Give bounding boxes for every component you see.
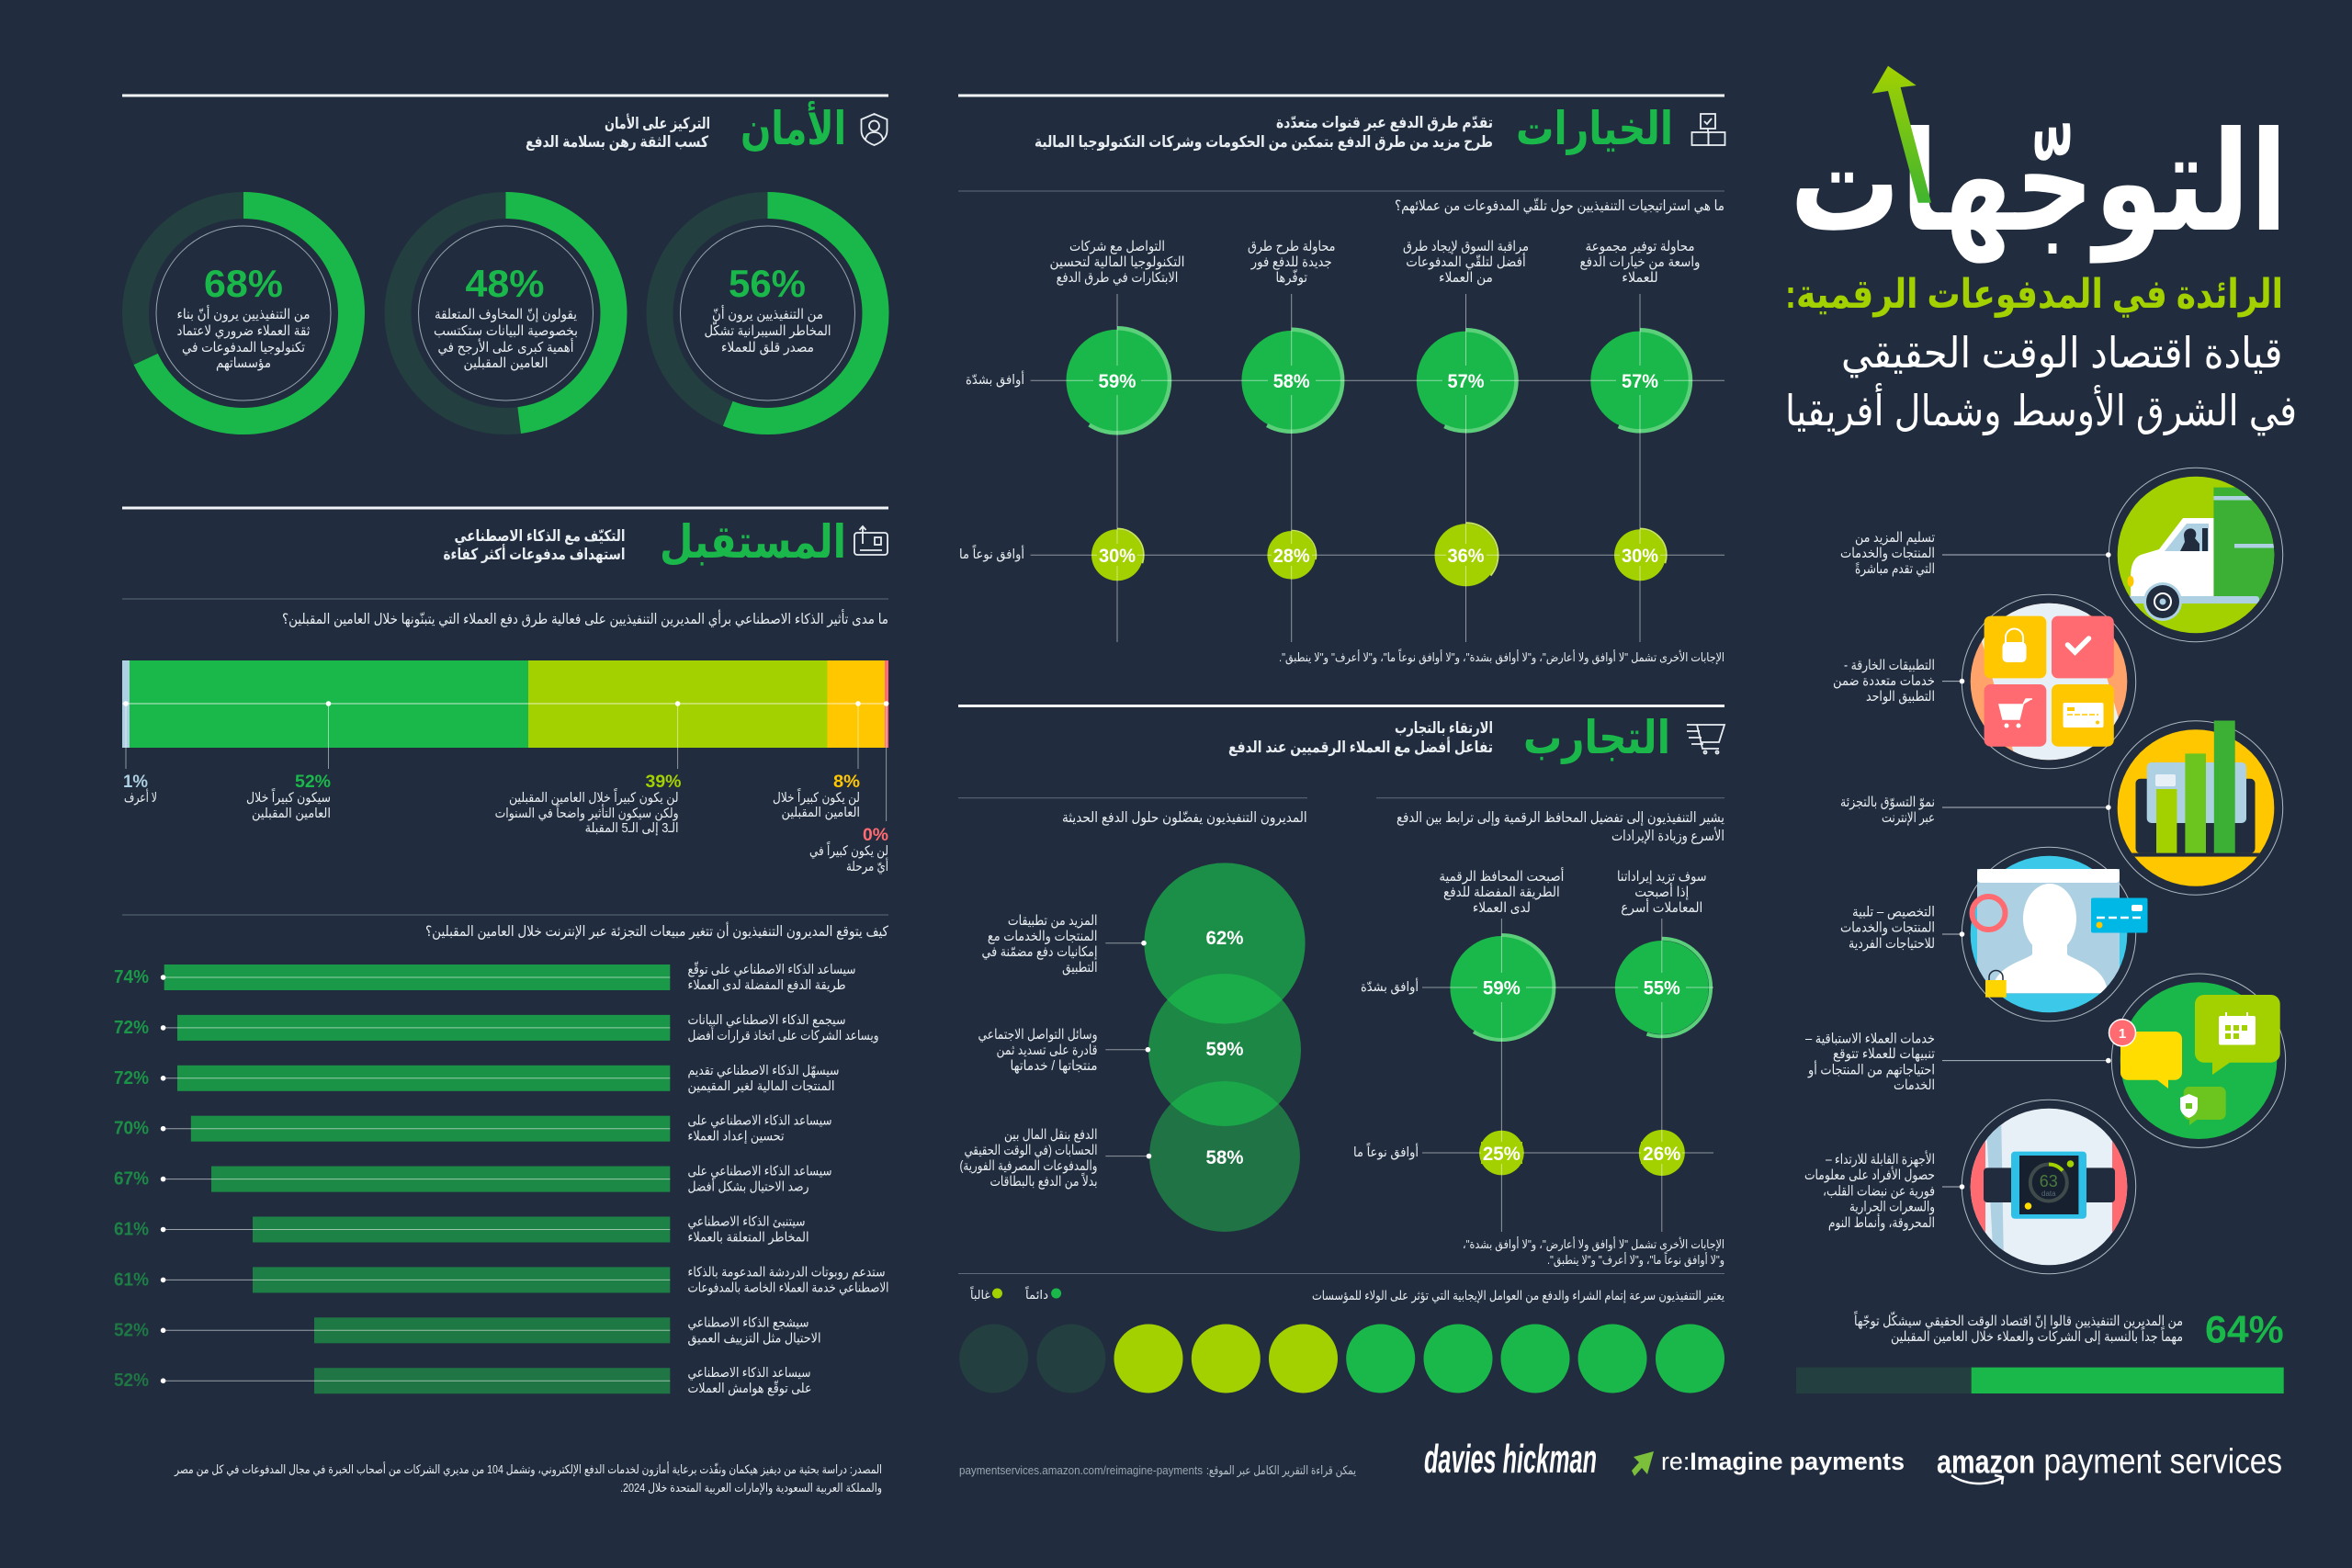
subtitle: white [1785,329,2297,436]
label: 39%: لن يكون كبيراً خلال العامين المقبلين [509,788,679,806]
bar row 52%: 52% [114,1371,149,1391]
bar row 70%: تحسين إعداد العملاء [687,1130,785,1145]
title block [1785,66,2297,436]
source note [174,1461,882,1495]
donut: 48%: أهمية كبرى على الأرجح في [437,338,573,356]
logo: amazon payment services [1937,1442,2282,1484]
donut: 56%: من التنفيذيين يرون أنّ [712,305,823,322]
bar row 52%: 52% [114,1320,149,1340]
trend: proactive service: 1 [2119,1026,2126,1042]
venn labels: الحسابات (في الوقت الحقيقي [965,1143,1097,1159]
bar row 70%: 70% [114,1119,149,1139]
footnote [1463,1236,1724,1268]
bar row 74%: 74% [114,967,149,987]
bubble matrix chart: أوافق نوعاً ما [959,545,1024,562]
heading: future: استهداف مدفوعات أكثر كفاءة [443,544,625,564]
bubble matrix chart: 57% [1622,371,1658,392]
venn labels: المزيد من تطبيقات [1008,913,1097,929]
report link: paymentservices.amazon.com/reimagine-payments [959,1464,1203,1477]
bar row 61%: 61% [114,1220,149,1240]
venn chart: 59% [1205,1039,1244,1060]
bar row 70% [114,1114,832,1145]
venn labels: الدفع بنقل المال بين [1004,1127,1097,1143]
panel: choices [958,94,1725,665]
bar row 61%: ستدعم روبوتات الدردشة المدعومة بالذكاء [687,1265,886,1280]
bar row 52%: سيساعد الذكاء الاصطناعي [687,1366,810,1381]
bar row 72%: 72% [114,1018,149,1038]
trend: proactive service label: احتياجاتهم من المنتجات أو [1807,1060,1935,1077]
trend: personalisation label: المنتجات والخدمات [1840,920,1935,936]
trend: super apps label: خدمات متعددة ضمن [1833,673,1935,689]
donut: 68% [136,206,351,421]
label: 8%: 8% [833,773,860,792]
trend: online retail [2106,720,2283,895]
bar row 72%: 72% [114,1068,149,1089]
donut: 48%: يقولون إنّ المخاوف المتعلقة [435,307,577,322]
wallet column labels: إذا أصبحت [1634,883,1689,900]
column labels [1049,239,1700,287]
heading: experiences [1228,712,1670,764]
label: don't know 1% [123,773,157,806]
heading: future: التكيّف مع الذكاء الاصطناعي [454,527,625,546]
icon: shield [862,114,888,145]
bar row 67%: سيساعد الذكاء الاصطناعي على [687,1165,832,1179]
logo: amazon payment services: payment services [2043,1442,2282,1481]
bar row 70%: سيساعد الذكاء الاصطناعي على [687,1114,832,1129]
bubble matrix chart: 58% [1273,371,1310,392]
connector lines [1942,555,2109,1187]
wallet bubble chart: 26% [1643,1144,1681,1165]
bubble matrix chart: 59% [1099,371,1136,392]
trend: proactive service label: خدمات العملاء الاستباقية – [1805,1031,1935,1046]
legend [970,1286,1061,1302]
sub-heading: modern solutions: المديرون التنفيذيون يفضّلون حلول الدفع الحديثة [1062,810,1307,827]
label: 52%: العامين المقبلين [252,807,331,821]
sub-heading: wallets [1396,810,1724,845]
wallet bubble chart: 55% [1644,977,1680,999]
heading: security: الأمان [741,100,846,154]
trend: delivery label: التي تقدم مباشرةً [1855,561,1935,578]
footnote: الإجابات الأخرى تشمل "لا أوافق ولا أعارض"، و"لا أوافق بشدة"، و"لا أوافق نوعاً ما"، و"لا أعرف" و"لا ينطبق". [1279,649,1724,665]
bar row 72%: سيجمع الذكاء الاصطناعي البيانات [687,1013,845,1028]
trend: personalisation label [1840,904,1935,952]
wallet column labels [1439,867,1707,916]
bar row 67% [114,1165,832,1195]
report link: يمكن قراءة التقرير الكامل عبر الموقع: [1206,1463,1356,1478]
donut: 68%: من التنفيذيين يرون أنّ بناء [176,305,311,322]
wallet column labels: أصبحت المحافظ الرقمية [1439,867,1564,885]
trend: wearables label: الأجهزة القابلة للارتداء – [1826,1150,1935,1168]
trend: delivery label [1840,530,1935,578]
label: 8% [773,773,860,820]
trend: delivery label: تسليم المزيد من [1855,530,1935,546]
icon: card with arrow [854,526,888,555]
trend: proactive service label [1805,1031,1935,1093]
callout: 64% real-time economy [1796,1308,2284,1393]
heading: choices: طرح مزيد من طرق الدفع بتمكين من الحكومات وشركات التكنولوجيا المالية [1035,133,1493,152]
loyalty statement: يعتبر التنفيذيون سرعة إتمام الشراء والدفع من العوامل الإيجابية التي تؤثر على الولاء للمؤسسات [1312,1288,1724,1303]
column labels: واسعة من خيارات الدفع [1580,254,1700,270]
footnote: و"لا أوافق نوعاً ما"، و"لا أعرف" و"لا ينطبق". [1547,1251,1724,1268]
wallet bubble chart: أوافق نوعاً ما [1353,1143,1419,1160]
stacked bar chart [122,660,888,821]
bar row 61% [114,1214,808,1246]
column labels: للعملاء [1622,270,1658,286]
trend: super apps label: التطبيقات الخارقة - [1844,658,1935,673]
trend: proactive service label: الخدمات [1894,1077,1935,1093]
trend: online retail label: عبر الإنترنت [1882,810,1935,826]
callout: 64% real-time economy: 64% [2205,1308,2284,1350]
row: strongly agree bubbles [1065,328,1690,433]
donut: 68%: تكنولوجيا المدفوعات في [182,340,305,356]
trend: wearables: data [2041,1190,2056,1198]
venn labels: والمدفوعات المصرفية الفورية) [959,1158,1097,1174]
bar row 52%: سيشجع الذكاء الاصطناعي [687,1315,808,1330]
donut: 56%: المخاطر السيبرانية تشكّل [704,321,831,339]
column labels: أفضل لتلقّي المدفوعات [1406,253,1526,271]
donut: 56% [660,206,876,421]
panel: security [122,94,888,421]
bar row 72% [114,1013,878,1043]
venn labels [959,913,1097,1190]
bar row 72%: سيسهّل الذكاء الاصطناعي تقديم [687,1064,840,1078]
donut: 56%: مصدر قلق للعملاء [721,340,814,355]
bar row 74%: طريقة الدفع المفضلة لدى العملاء [687,978,845,993]
label: 0%: أيّ مرحلة [846,857,888,874]
trend: wearables label: والسعرات الحرارية [1849,1200,1935,1215]
question: كيف يتوقع المديرون التنفيذيون أن تتغير مبيعات التجزئة عبر الإنترنت خلال العامين المقبلين؟ [425,921,889,941]
trend: super apps [1959,593,2137,770]
bar row 52% [114,1366,812,1396]
label: don't know 1%: لا أعرف [124,788,157,806]
panel: future [114,507,889,1495]
label: 52%: 52% [295,773,331,792]
trend: wearables label: حصول الأفراد على معلومات [1804,1166,1935,1183]
source note: المصدر: دراسة بحثية من ديفيز هيكمان ونفّذت برعاية أمازون لخدمات الدفع الإلكتروني، وتشمل 104 من مديري الشركات من أصحاب الخبرة في مجال المدفوعات في كل من مصر [174,1461,882,1477]
wallet bubble chart [1353,919,1713,1232]
wallet column labels: لدى العملاء [1473,900,1531,916]
heading: security [526,100,846,154]
label: 52%: سيكون كبيراً خلال [246,788,331,806]
bar row 67%: رصد الاحتيال بشكل أفضل [687,1178,808,1195]
horizontal bar chart [114,961,889,1396]
bar row 61%: سيتنبئ الذكاء الاصطناعي [687,1214,805,1229]
trend: wearables label [1804,1150,1935,1231]
report link [959,1463,1356,1478]
donut: 48% [398,206,614,421]
donut: 68%: ثقة العملاء ضروري لاعتماد [176,323,311,340]
row: somewhat agree bubbles [1091,523,1667,587]
donut: 68%: 68% [204,262,283,305]
trend: proactive service label: تنبيهات للعملاء تتوقع [1833,1046,1935,1062]
donut: 48%: بخصوصية البيانات ستكتسب [434,323,578,339]
bubble matrix chart: 57% [1448,371,1485,392]
venn labels: منتجاتها / خدماتها [1011,1058,1097,1074]
trend: super apps label [1833,658,1935,705]
callout: 64% real-time economy: مهماً جداً بالنسبة إلى الشركات والعملاء خلال العامين المقبلين [1891,1326,2183,1345]
trend: wearables [1960,1100,2136,1274]
panel: experiences [958,705,1724,1393]
donut: 48%: 48% [465,262,544,305]
bar row 67%: 67% [114,1169,149,1190]
wallet bubble chart: أوافق بشدّة [1361,977,1419,995]
logo: davies hickman: davies hickman [1424,1437,1597,1482]
label: 39%: الـ3 إلى الـ5 المقبلة [585,821,679,836]
trend: wearables label: فورية عن نبضات القلب، [1823,1183,1935,1200]
bar row 52%: الاحتيال مثل التزييف العميق [687,1331,821,1346]
bubble matrix chart: 30% [1099,546,1136,567]
column labels: مراقبة السوق لإيجاد طرق [1403,239,1529,254]
wallet bubble chart: 25% [1483,1144,1521,1165]
venn labels: المنتجات والخدمات مع [988,929,1097,944]
logo: reimagine payments: re:Imagine payments [1661,1448,1905,1475]
bubble matrix chart: 30% [1622,546,1658,567]
trend: proactive service [2106,974,2286,1147]
bar row 61%: 61% [114,1269,149,1290]
trend: super apps label: التطبيق الواحد [1866,689,1935,705]
bar row 74% [114,961,856,993]
bar row 72%: المنتجات المالية لغير المقيمين [687,1079,834,1094]
donut: 68%: مؤسساتهم [216,355,271,371]
source note: والمملكة العربية السعودية والإمارات العربية المتحدة خلال 2024. [620,1481,882,1495]
arrow [1872,66,1931,203]
label: 39% [495,773,682,836]
pictogram: ten circles [959,1325,1724,1393]
label: 0% [809,826,888,874]
question: ما هي استراتيجيات التنفيذيين حول تلقّي المدفوعات من عملائهم؟ [1395,198,1724,215]
label: don't know 1%: 1% [123,773,148,792]
heading: experiences: تفاعل أفضل مع العملاء الرقميين عند الدفع [1228,737,1493,757]
column labels: من العملاء [1439,270,1493,286]
heading: experiences: التجارب [1523,712,1670,764]
donut: 48%: العامين المقبلين [463,355,548,371]
column labels: التواصل مع شركات [1069,239,1165,254]
sub-heading: wallets: يشير التنفيذيون إلى تفضيل المحافظ الرقمية وإلى ترابط بين الدفع [1396,810,1724,827]
subtitle: white: قيادة اقتصاد الوقت الحقيقي [1841,329,2282,378]
label: 52% [246,773,331,821]
heading: choices: تقدّم طرق الدفع عبر قنوات متعدّدة [1276,114,1493,132]
column labels: جديدة للدفع فور [1250,254,1332,270]
column labels: الابتكارات في طرق الدفع [1057,270,1178,287]
venn labels: بدلاً من الدفع بالبطاقات [990,1172,1097,1190]
question: ما مدى تأثير الذكاء الاصطناعي برأي المديرين التنفيذيين على فعالية طرق دفع العملاء التي يتبنّونها خلال العامين المقبلين؟ [282,609,888,628]
label: 0%: 0% [863,826,888,845]
bubble matrix chart [959,294,1724,642]
heading: future: المستقبل [660,516,846,568]
heading: experiences: الارتقاء بالتجارب [1395,719,1493,737]
label: 8%: لن يكون كبيراً خلال [773,788,860,806]
venn labels: قادرة على تسديد ثمن [996,1043,1097,1058]
wallet column labels: المعاملات أسرع [1621,898,1702,916]
legend: دائماً [1025,1286,1048,1302]
trend: personalisation [1960,847,2148,1021]
venn chart [1105,863,1306,1232]
heading: security: كسب الثقة رهن بسلامة الدفع [526,133,708,152]
icon: cart [1687,725,1724,753]
trend: wearables: 63 [2040,1172,2058,1190]
logo: amazon payment services: amazon [1937,1442,2035,1481]
bubble matrix chart: 28% [1273,546,1310,567]
heading: future [443,516,846,568]
sub-heading: wallets: الأسرع وزيادة الإيرادات [1611,827,1724,845]
trend: personalisation label: للاحتياجات الفردية [1849,936,1935,952]
heading: choices [1035,103,1673,155]
callout: 64% real-time economy: من المديرين التنفيذيين قالوا إنّ اقتصاد الوقت الحقيقي سيشكّل توجّهاً [1853,1311,2183,1330]
column labels: محاولة طرح طرق [1248,239,1335,254]
trend: personalisation label: التخصيص – تلبية [1852,904,1935,920]
wallet column labels: سوف تزيد إيراداتنا [1617,869,1707,885]
wallet column labels: الطريقة المفضلة للدفع [1443,885,1560,900]
label: 0%: لن يكون كبيراً في [809,841,888,859]
column labels: توفّرها [1275,269,1307,286]
column labels: محاولة توفير مجموعة [1586,239,1694,254]
venn labels: إمكانيات دفع مضمّنة في [981,944,1097,961]
heading: security: التركيز على الأمان [605,114,710,133]
label: 39%: ولكن سيكون التأثير واضحاً في السنوات [495,804,679,821]
bar row 52%: على توقّع هوامش العملات [687,1380,812,1396]
venn chart: 62% [1205,928,1244,949]
trend: wearables label: المحروقة، وأنماط النوم [1828,1213,1935,1231]
footnote: الإجابات الأخرى تشمل "لا أوافق ولا أعارض"، و"لا أوافق بشدة"، [1463,1236,1724,1252]
bubble matrix chart: 36% [1448,546,1485,567]
bar row 52% [114,1315,821,1346]
trend: online retail label: نموّ التسوّق بالتجزئة [1840,795,1935,810]
bubble matrix chart: أوافق بشدّة [966,370,1024,388]
venn labels: التطبيق [1062,960,1097,976]
donut: 56%: 56% [729,262,806,305]
legend: غالباً [970,1286,990,1302]
panel: trends [1804,468,2287,1274]
icon: option boxes [1692,114,1725,145]
bar row 61% [114,1265,889,1295]
trend: online retail label [1840,795,1935,826]
venn chart: 58% [1205,1147,1244,1168]
bar row 61%: الاصطناعي خدمة العملاء الخاصة بالمدفوعات [687,1280,889,1295]
label: 8%: العامين المقبلين [781,806,860,820]
venn labels: وسائل التواصل الاجتماعي [978,1027,1097,1043]
trend: delivery [2106,468,2287,642]
wallet bubble chart: 59% [1483,977,1521,999]
label: 39%: 39% [645,773,682,792]
trend: delivery label: المنتجات والخدمات [1840,546,1935,561]
bar row 61%: المخاطر المتعلقة بالعملاء [687,1231,808,1246]
bar row 72%: ويساعد الشركات على اتخاذ قرارات أفضل [687,1026,878,1043]
bar row 72% [114,1064,840,1094]
column labels: التكنولوجيا المالية لتحسين [1049,254,1185,270]
heading: choices: الخيارات [1516,103,1673,155]
bar row 74%: سيساعد الذكاء الاصطناعي على توقّع [687,961,856,977]
